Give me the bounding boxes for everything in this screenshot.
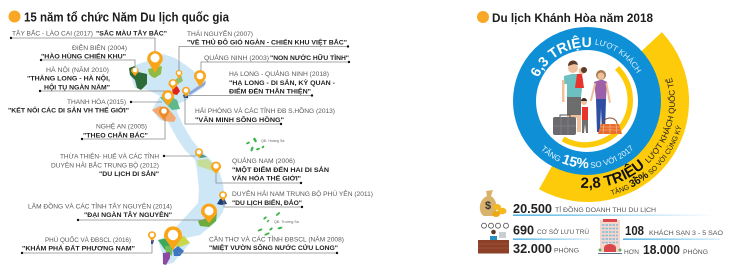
text: Quảng Ninh [204, 53, 349, 62]
pin: Thanh Hóa [162, 90, 174, 106]
pin: Lào Cai [147, 51, 163, 73]
text: Thừa Thiên Huế: THỪA THIÊN- HUẾ VÀ CÁC TỈNH [60, 150, 159, 160]
text: Phú Yên [232, 189, 373, 207]
family illustration [553, 60, 622, 135]
text: Hải Phòng: HẢI PHÒNG VÀ CÁC TỈNH ĐB S.HỒNG (2013) [195, 105, 335, 115]
figure: 20.500: 20.500 [513, 202, 552, 216]
yellow sector: international visitors [539, 32, 689, 202]
icon: hotel building [598, 219, 622, 254]
text: Thái Nguyên: "VỀ THỦ ĐÔ GIÓ NGÀN - CHIẾN KHU VIỆT BẮC" [187, 36, 347, 46]
text: Điện Biên: "HÀO HÙNG CHIẾN KHU" [41, 50, 126, 60]
text: Nghệ An: "THEO CHÂN BÁC" [83, 130, 148, 140]
text: Quảng Nam [232, 156, 329, 182]
text: Hải Phòng [195, 105, 335, 124]
label: establishments: CƠ SỞ LƯU TRÚ [537, 227, 589, 236]
text: Nghệ An: NGHỆ AN (2005) [96, 122, 147, 130]
label: Hoàng Sa: QĐ. Hoàng Sa [261, 139, 284, 143]
map base: country outline [129, 54, 225, 265]
icon: money bag [480, 190, 506, 217]
checkered bag [598, 118, 622, 134]
blue ring: total visitors [524, 38, 650, 164]
pin: Quảng Ninh [194, 70, 206, 87]
woman [590, 70, 611, 132]
ring label: visitors: LƯỢT KHÁCH [595, 39, 642, 73]
rule [513, 238, 590, 240]
text: Phú Quốc: "KHÁM PHÁ ĐẤT PHƯƠNG NAM" [22, 242, 135, 252]
text: Hạ Long [229, 69, 335, 96]
text: Quảng Nam: QUẢNG NAM (2006) [232, 156, 295, 165]
leader lines [10, 37, 350, 254]
pin: Phú Yên [219, 191, 227, 201]
label: Trường Sa: QĐ. Trường Sa [274, 220, 299, 224]
icon: money bag: $ [485, 200, 491, 212]
pin: Huế [195, 148, 203, 158]
text: Điện Biên: ĐIỆN BIÊN (2004) [72, 43, 127, 52]
pin: Điện Biên [131, 68, 139, 76]
map regions: coloured provinces [129, 66, 227, 265]
girl on shoulder [575, 67, 587, 88]
text: Quảng Ninh: QUẢNG NINH (2003) [204, 53, 269, 62]
text: Tây Bắc - Lào Cai: TÂY BẮC - LÀO CAI (2017) [12, 28, 93, 38]
text: Hà Nội: HỘI TỤ NGÀN NĂM" [44, 82, 110, 92]
right panel: Khánh Hòa tourism 2018 [477, 11, 723, 257]
text: Phú Quốc [22, 234, 135, 252]
pin: Nghệ An [159, 107, 169, 120]
label: revenue: TỈ ĐỒNG DOANH THU DU LỊCH [555, 204, 656, 214]
heading: Khánh Hòa 2018: Du lịch Khánh Hòa năm 2018 [492, 13, 654, 25]
heading marker: orange dot [477, 11, 489, 23]
heading: 15 years: 15 năm tổ chức Năm Du lịch quốc gia [24, 10, 230, 24]
stat: hotels [598, 219, 723, 257]
child [581, 98, 588, 133]
stat: revenue [480, 190, 715, 217]
pin: Thái Nguyên [176, 70, 182, 79]
man [562, 60, 583, 132]
left panel: national tourism years map [8, 10, 373, 265]
text: Hạ Long: "HẠ LONG - DI SẢN, KỲ QUAN - [229, 78, 335, 87]
pin: Quảng Nam [211, 162, 221, 174]
text: Thái Nguyên [187, 29, 347, 46]
rule [623, 238, 720, 240]
arc label: up 36 percent: TĂNG 36% SO VỚI CÙNG KỲ [610, 125, 682, 195]
text: Tây Bắc - Lào Cai: "SẮC MÀU TÂY BẮC" [96, 28, 167, 38]
text: Thanh Hóa: "KẾT NỐI CÁC DI SẢN VH THẾ GIỚI" [8, 104, 129, 114]
pin: Hà Nội [168, 79, 177, 90]
label: 3-5 star hotels: KHÁCH SẠN 3 - 5 SAO [649, 228, 723, 237]
text: Thanh Hóa [8, 97, 129, 114]
text: Quảng Ninh: "NON NƯỚC HỮU TÌNH" [270, 53, 349, 62]
arc label: 2.8 million international: 2,8 TRIỆU LƯỢT KHÁCH QUỐC TẾ [580, 78, 676, 190]
suitcase [553, 115, 576, 135]
heading marker: orange dot [8, 10, 20, 22]
text: Quảng Nam: "MỘT ĐIỂM ĐẾN HAI DI SẢN [232, 164, 329, 174]
text: Điện Biên [41, 43, 127, 60]
text: Thanh Hóa: THANH HÓA (2015) [67, 97, 126, 106]
islands: Hoàng Sa [246, 137, 265, 152]
text: Lâm Đồng: "ĐẠI NGÀN TÂY NGUYÊN" [84, 210, 172, 219]
figure: 108: 108 [625, 224, 644, 238]
pin: Hải Phòng [182, 87, 190, 97]
figure: 18.000: 18.000 [643, 243, 680, 257]
inner yellow arc [563, 68, 630, 145]
text: Quảng Nam: VĂN HÓA THẾ GIỚI" [232, 172, 301, 182]
icon: reception desk [478, 223, 509, 254]
text: Thừa Thiên Huế: DUYÊN HẢI BẮC TRUNG BỘ (2012) [51, 160, 159, 170]
ring label: 6,3 million: 6,3 TRIỆU [531, 35, 591, 76]
ring label: up 15 percent: TĂNG 15% SO VỚI 2017 [542, 145, 632, 168]
text: Thái Nguyên: THÁI NGUYÊN (2007) [187, 29, 253, 38]
figure: 690: 690 [513, 224, 534, 238]
text: Cần Thơ [209, 234, 344, 252]
figure: 32.000: 32.000 [513, 242, 552, 256]
text: Hà Nội: "THĂNG LONG - HÀ NỘI, [27, 74, 110, 82]
pin: Lâm Đồng [201, 204, 217, 223]
rule [513, 214, 715, 216]
text: Phú Yên: DUYÊN HẢI NAM TRUNG BỘ PHÚ YÊN (2011) [232, 189, 373, 198]
islands: Trường Sa [257, 212, 283, 236]
text: Hạ Long: HẠ LONG - QUẢNG NINH (2018) [229, 69, 329, 78]
text: Nghệ An [83, 122, 148, 140]
text: Cần Thơ: "MIỆT VƯỜN SÔNG NƯỚC CỬU LONG" [209, 243, 338, 252]
text: Hà Nội [27, 65, 110, 92]
text: Thừa Thiên Huế: "DU LỊCH DI SẢN" [99, 169, 159, 178]
text: Thừa Thiên Huế [51, 150, 159, 178]
text: Hà Nội: HÀ NỘI (NĂM 2010) [46, 65, 109, 74]
text: Lâm Đồng [28, 200, 172, 219]
map pins [131, 51, 227, 250]
text: Hạ Long: ĐIỂM ĐẾN THÂN THIỆN" [229, 86, 311, 96]
text: Hải Phòng: "VĂN MINH SÔNG HỒNG" [195, 114, 284, 124]
label: rooms: PHÒNG [554, 246, 579, 254]
text: Phú Yên: "DU LỊCH BIỂN, ĐẢO" [232, 198, 302, 207]
label: more than: HƠN [624, 249, 639, 256]
text: Cần Thơ: CẦN THƠ VÀ CÁC TỈNH ĐBSCL (NĂM 2008) [209, 234, 344, 244]
text: Lâm Đồng: LÂM ĐỒNG VÀ CÁC TỈNH TÂY NGUYÊN (2014) [28, 200, 172, 210]
stat: accommodation [478, 223, 590, 256]
pin: ĐBSCL [164, 226, 182, 250]
donut chart: visitors [513, 27, 690, 202]
pin: Phú Quốc [148, 231, 156, 241]
text: Tây Bắc - Lào Cai [12, 28, 167, 38]
label: rooms: PHÒNG [683, 247, 708, 256]
text: Phú Quốc: PHÚ QUỐC VÀ ĐBSCL (2016) [45, 234, 131, 244]
map of Vietnam [129, 54, 299, 265]
